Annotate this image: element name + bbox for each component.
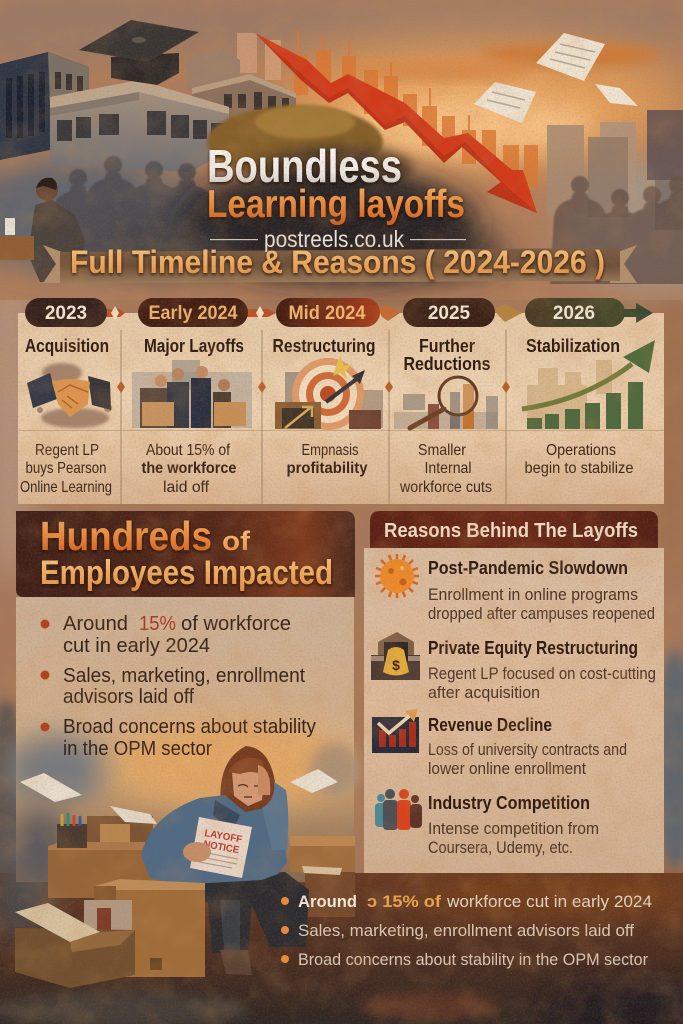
bullet list: advisors laid off bbox=[63, 686, 194, 708]
reason: revenue decline: lower online enrollment bbox=[428, 760, 586, 778]
year pills: 2023 bbox=[45, 303, 87, 324]
front box bbox=[94, 879, 205, 977]
crowd silhouettes left bbox=[55, 156, 214, 252]
right stacked boxes bbox=[290, 836, 355, 917]
bullet list: in the OPM sector bbox=[63, 738, 212, 760]
column: further reductions: workforce cuts bbox=[399, 479, 492, 496]
panel heading: Employees Impacted bbox=[40, 554, 333, 592]
column: acquisition: Online Learning bbox=[20, 479, 112, 496]
man carrying box bbox=[0, 178, 85, 282]
column: major layoffs: laid off bbox=[163, 479, 210, 496]
panel heading: Reasons Behind The Layoffs bbox=[384, 519, 638, 542]
crowd silhouettes right bbox=[550, 176, 683, 284]
ribbon banner bbox=[43, 245, 637, 283]
fact 3: Broad concerns about stability in the OPM sector bbox=[298, 951, 648, 969]
divider diamonds bbox=[117, 381, 510, 393]
shirt and arms bbox=[141, 795, 287, 885]
column: stabilization: begin to stabilize bbox=[524, 460, 634, 477]
icon: rising bars and arrow bbox=[522, 340, 655, 429]
column: acquisition bbox=[20, 335, 112, 496]
layoff notice: LAYOFF bbox=[203, 828, 243, 846]
reason: revenue decline bbox=[372, 709, 627, 778]
column: acquisition: buys Pearson bbox=[26, 460, 106, 477]
icon: bank with money bag bbox=[371, 632, 420, 680]
main campus building bbox=[50, 80, 229, 172]
reason: post-pandemic slowdown bbox=[375, 554, 655, 623]
face bbox=[232, 768, 264, 806]
tree bbox=[207, 105, 412, 190]
bullet list bbox=[40, 613, 316, 760]
left stacked boxes bbox=[48, 806, 160, 898]
graduation cap bbox=[79, 20, 199, 85]
column: restructuring: profitability bbox=[286, 460, 368, 477]
column: further reductions: Reductions bbox=[404, 353, 490, 374]
title: Boundless bbox=[207, 140, 402, 192]
column: major layoffs: the workforce bbox=[142, 460, 237, 477]
icon: magnifier over bars bbox=[394, 377, 498, 429]
layoff notice bbox=[183, 817, 252, 878]
column: stabilization: Stabilization bbox=[526, 335, 620, 356]
column: stabilization bbox=[522, 335, 655, 477]
icon: bank with money bag: $ bbox=[392, 657, 400, 673]
column: acquisition: Acquisition bbox=[25, 335, 109, 356]
icon: group of people bbox=[375, 789, 422, 830]
reason: revenue decline: Revenue Decline bbox=[428, 715, 552, 735]
hair back bbox=[220, 746, 276, 822]
reason: post-pandemic slowdown: Post-Pandemic Slowdown bbox=[428, 558, 628, 578]
reason: private equity restructuring bbox=[371, 632, 656, 702]
panel heading: of bbox=[222, 526, 251, 556]
header illustration bbox=[0, 0, 683, 300]
column: stabilization: Operations bbox=[546, 442, 616, 459]
reason: post-pandemic slowdown: dropped after campuses reopened bbox=[428, 605, 655, 623]
fact 1: workforce cut in early 2024 bbox=[446, 893, 652, 911]
icon: workers with boxes bbox=[132, 360, 252, 428]
reason: post-pandemic slowdown: Enrollment in online programs bbox=[428, 586, 638, 604]
column: acquisition: Regent LP bbox=[35, 442, 99, 459]
bullet list: 15% bbox=[139, 613, 176, 635]
sky bbox=[0, 0, 683, 300]
right buildings bbox=[547, 110, 683, 230]
title: Learning layoffs bbox=[207, 183, 465, 226]
reason: industry competition: Intense competition from bbox=[428, 820, 599, 838]
timeline panel bbox=[18, 298, 664, 504]
panel heading bbox=[16, 511, 355, 597]
title bbox=[207, 140, 465, 226]
year pills: 2026 bbox=[553, 303, 595, 324]
layoff notice: NOTICE bbox=[202, 839, 240, 856]
column: restructuring: Restructuring bbox=[272, 335, 376, 356]
column: major layoffs: Major Layoffs bbox=[144, 335, 244, 356]
column: further reductions: Internal bbox=[424, 460, 472, 477]
reason: industry competition: Industry Competition bbox=[428, 793, 590, 813]
flying papers bbox=[474, 33, 638, 123]
back buildings bbox=[187, 48, 296, 130]
column: further reductions bbox=[394, 335, 498, 496]
reason: private equity restructuring: after acquisition bbox=[428, 684, 540, 702]
reason: industry competition bbox=[375, 789, 599, 857]
year pills bbox=[25, 298, 625, 327]
bullet list: Sales, marketing, enrollment bbox=[63, 665, 305, 687]
panel heading: Hundreds bbox=[40, 513, 212, 559]
floating papers bbox=[20, 769, 338, 802]
year pills: Early 2024 bbox=[148, 303, 238, 324]
illustration: woman among boxes bbox=[15, 746, 355, 988]
shoe bbox=[220, 950, 252, 975]
site name: postreels.co.uk bbox=[264, 226, 404, 252]
fact 1: Around bbox=[298, 893, 357, 911]
fact 2: Sales, marketing, enrollment advisors laid off bbox=[298, 922, 634, 940]
column: major layoffs bbox=[132, 335, 252, 496]
dark haze behind title bbox=[100, 167, 510, 283]
left dark building bbox=[0, 52, 89, 160]
column: further reductions: Further bbox=[419, 335, 475, 356]
bullet list: Around bbox=[63, 613, 128, 635]
subtitle: Full Timeline & Reasons ( 2024-2026 ) bbox=[70, 244, 605, 280]
icon: virus bbox=[375, 554, 419, 598]
city candles bbox=[237, 30, 538, 187]
reason: revenue decline: Loss of university contracts and bbox=[428, 741, 627, 759]
column: restructuring: Empnasis bbox=[302, 442, 358, 459]
icon: handshake bbox=[27, 363, 112, 428]
reason: private equity restructuring: Regent LP focused on cost-cutting bbox=[428, 665, 656, 683]
woman bbox=[141, 746, 309, 975]
falling red arrow bbox=[255, 33, 537, 213]
panel: reasons behind the layoffs bbox=[364, 511, 664, 873]
year pills: 2025 bbox=[428, 303, 471, 324]
icon: chart with check bbox=[372, 709, 419, 753]
bullet list: Broad concerns about stability bbox=[63, 716, 316, 738]
column: major layoffs: About 15% of bbox=[146, 442, 230, 459]
bullet list: cut in early 2024 bbox=[63, 635, 210, 657]
bottom dark band bbox=[0, 860, 683, 1024]
open lower box bbox=[15, 900, 135, 988]
fact 1: ↄ 15% of bbox=[367, 893, 442, 911]
fact 1 bbox=[281, 893, 652, 911]
legs bbox=[170, 872, 309, 953]
reason: private equity restructuring: Private Equity Restructuring bbox=[428, 638, 638, 658]
panel: hundreds of employees impacted bbox=[5, 511, 360, 890]
column: further reductions: Smaller bbox=[418, 442, 467, 459]
bullet list: of workforce bbox=[181, 613, 291, 635]
year pills: Mid 2024 bbox=[288, 303, 366, 324]
column: restructuring bbox=[272, 335, 383, 477]
panel heading bbox=[370, 511, 658, 548]
bottom key facts bbox=[281, 893, 652, 969]
reason: industry competition: Coursera, Udemy, etc. bbox=[428, 839, 573, 857]
icon: target with arrow bbox=[275, 356, 383, 430]
arrows between years bbox=[104, 303, 653, 323]
